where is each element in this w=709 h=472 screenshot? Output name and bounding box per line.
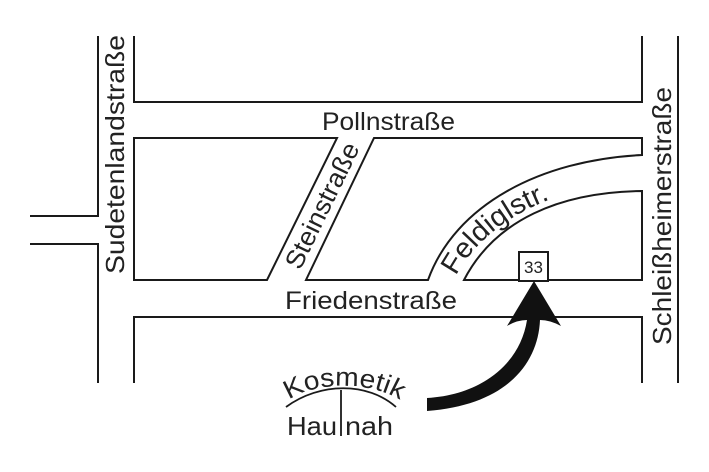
label: Pollnstraße: Pollnstraße (322, 108, 455, 136)
logo: Kosmetik Hautnah: Hau (287, 411, 337, 441)
label: Steinstraße: Steinstraße (278, 137, 365, 274)
label: Friedenstraße: Friedenstraße (285, 287, 457, 315)
arrow to house (427, 281, 561, 411)
house number 33: 33 (524, 258, 543, 277)
label: Sudetenlandstraße: Sudetenlandstraße (100, 35, 130, 274)
logo: Kosmetik Hautnah: nah (345, 411, 393, 441)
logo: Kosmetik Hautnah: Kosmetik (282, 372, 406, 400)
label: Schleißheimerstraße: Schleißheimerstraße (647, 87, 677, 345)
house number 33 (519, 252, 548, 281)
street outlines (30, 36, 678, 383)
logo: Kosmetik Hautnah (282, 372, 406, 441)
label: Feldiglstr.: Feldiglstr. (440, 188, 548, 274)
